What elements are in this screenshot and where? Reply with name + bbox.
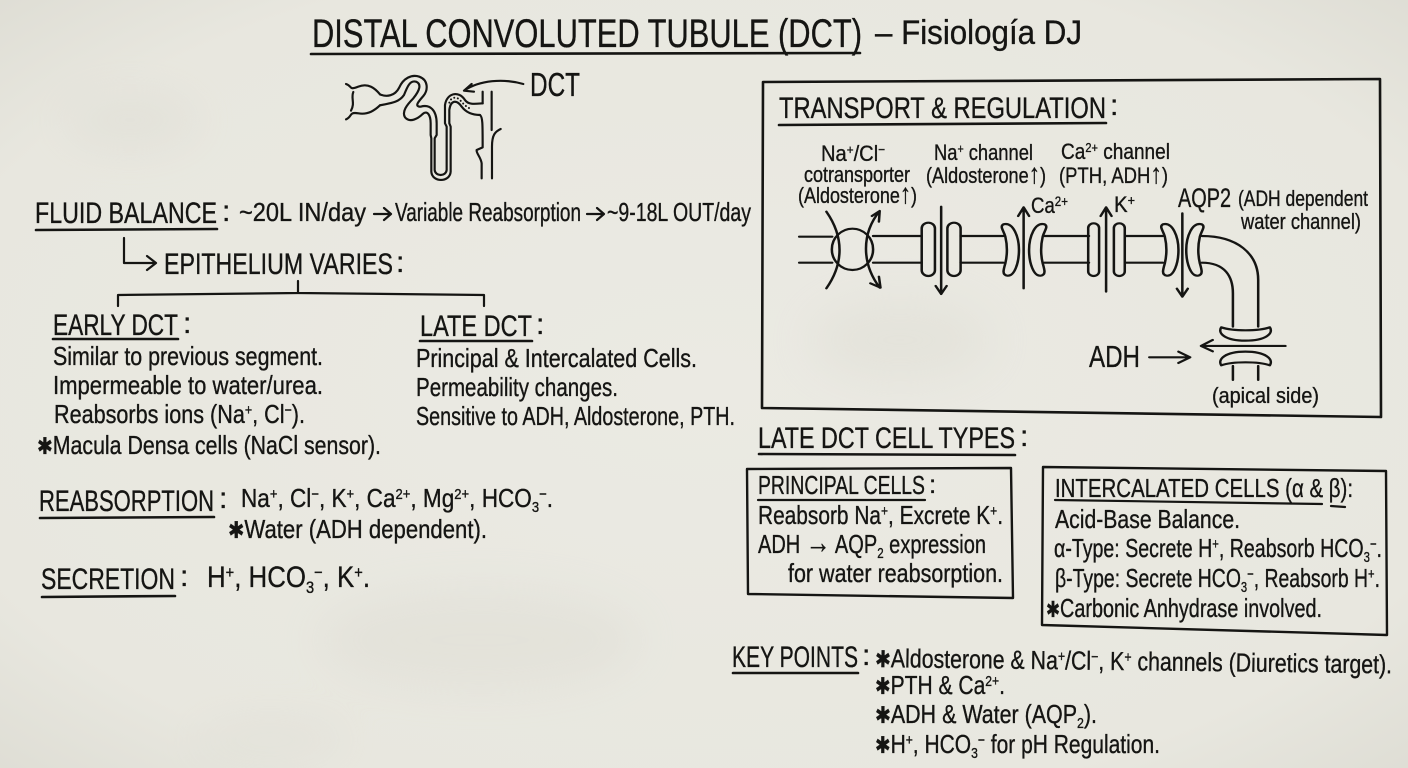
key points: ✱ADH & Water (AQP <box>875 699 1117 729</box>
reabsorption: − <box>311 486 319 503</box>
label: K ion: + <box>1128 192 1135 208</box>
key points: : <box>862 639 870 672</box>
reabsorption: : <box>219 482 227 515</box>
heading: late DCT cell types: LATE DCT CELL TYPES <box>758 422 1015 455</box>
label: Ca channel: (PTH, ADH↑) <box>1059 158 1168 189</box>
panel: early DCT: Similar to previous segment. <box>53 341 323 371</box>
reabsorption: , Mg <box>410 483 454 513</box>
panel: intercalated cells: + <box>1368 566 1375 583</box>
label: Na Cl cotransporter <box>798 141 917 209</box>
reabsorption: Na <box>241 483 274 513</box>
panel: transport and regulation <box>762 79 1381 417</box>
panel: intercalated cells: , Reabsorb H <box>1254 563 1368 593</box>
key points: + <box>1124 649 1132 666</box>
panel: early DCT: ✱Macula Densa cells (NaCl sensor). <box>37 430 381 460</box>
key points: 2 <box>1077 715 1084 732</box>
reabsorption: , Cl <box>277 483 311 513</box>
secretion: 3 <box>306 578 314 597</box>
label: Na channel <box>926 140 1046 189</box>
fluid balance line: ~20L IN/day <box>239 197 366 227</box>
panel: intercalated cells: − <box>1247 566 1254 583</box>
secretion: . <box>363 561 370 594</box>
label: Na Cl cotransporter: (Aldosterone↑) <box>798 178 917 209</box>
secretion: + <box>354 563 363 582</box>
fluid balance line: ~9-18L OUT/day <box>607 197 751 227</box>
panel: principal cells: Reabsorb Na <box>758 500 911 530</box>
label: AQP2: water channel) <box>1240 209 1361 234</box>
panel: principal cells: 2 <box>877 545 884 562</box>
nephron diagram with DCT label: DCT <box>530 66 580 103</box>
panel: principal cells: expression <box>884 529 986 559</box>
label: Na channel: channel <box>964 140 1033 165</box>
title: – Fisiología DJ <box>875 14 1082 52</box>
label: Ca channel: channel <box>1098 139 1170 164</box>
panel: early DCT: EARLY DCT <box>53 309 178 342</box>
fluid balance line: : <box>222 195 230 228</box>
panel: intercalated cells: + <box>1212 536 1219 553</box>
title: DISTAL CONVOLUTED TUBULE (DCT) <box>312 12 862 56</box>
secretion: : <box>180 560 188 593</box>
secretion: − <box>314 563 323 582</box>
label: Na Cl cotransporter: + <box>847 142 854 157</box>
nephron diagram with DCT label <box>346 66 580 180</box>
secretion: H <box>207 561 229 594</box>
panel: principal cells: , Excrete K <box>888 500 991 530</box>
label: apical side: (apical side) <box>1212 383 1319 408</box>
panel: early DCT: Impermeable to water/urea. <box>53 370 323 400</box>
panel: early DCT: + <box>245 402 252 419</box>
panel: principal cells: for water reabsorption. <box>788 558 1003 588</box>
reabsorption: , K <box>319 483 347 513</box>
transport heading: : <box>1110 89 1118 122</box>
epithelium varies branch: EPITHELIUM VARIES <box>164 248 393 281</box>
label: AQP2: AQP2 <box>1178 183 1231 213</box>
panel: intercalated cells <box>1042 467 1387 635</box>
reabsorption: , Ca <box>354 483 396 513</box>
label: K ion: K <box>1114 192 1129 217</box>
label: Ca channel: 2+ <box>1085 140 1098 155</box>
panel: principal cells <box>747 468 1013 598</box>
key points: − <box>978 732 985 749</box>
secretion <box>41 560 370 597</box>
label: Na Cl cotransporter: Na <box>821 141 850 166</box>
key points: 3 <box>971 745 978 762</box>
panel: late DCT: LATE DCT <box>420 310 532 343</box>
reabsorption: + <box>270 486 278 503</box>
key points: for pH Regulation. <box>985 729 1160 759</box>
key points: ✱PTH & Ca <box>875 670 1008 700</box>
reabsorption: 3 <box>532 499 539 516</box>
label: AQP2: (ADH dependent <box>1238 186 1369 211</box>
secretion: + <box>226 563 234 582</box>
label: AQP2 <box>1178 183 1369 234</box>
reabsorption <box>39 482 553 544</box>
epithelium varies branch: : <box>396 246 404 279</box>
panel: early DCT: , Cl <box>252 399 285 429</box>
panel: intercalated cells: β-Type: Secrete HCO <box>1055 563 1304 593</box>
transport heading: TRANSPORT & REGULATION <box>779 92 1106 125</box>
panel: principal cells: . <box>997 500 1003 530</box>
fluid balance line: Variable Reabsorption <box>395 197 581 227</box>
key points: ✱H <box>875 729 909 759</box>
panel: intercalated cells: α-Type: Secrete H <box>1054 533 1264 563</box>
key points: . <box>999 670 1005 700</box>
epithelium varies branch <box>118 238 484 306</box>
panel: intercalated cells: ✱Carbonic Anhydrase involved. <box>1046 593 1322 623</box>
panel: early DCT: Reabsorbs ions (Na <box>54 399 284 429</box>
panel: early DCT: ). <box>292 399 305 429</box>
panel: late DCT: : <box>536 308 544 341</box>
label: ADH: ADH <box>1089 339 1140 374</box>
label: Na Cl cotransporter: − <box>878 142 885 157</box>
secretion: , HCO <box>234 561 306 594</box>
panel: intercalated cells: − <box>1370 536 1377 553</box>
panel: intercalated cells: 3 <box>1241 579 1247 596</box>
label: Ca ion: 2+ <box>1055 193 1068 209</box>
panel: early DCT: : <box>183 307 191 340</box>
reabsorption: 2+ <box>454 486 469 503</box>
reabsorption: ✱Water (ADH dependent). <box>228 514 487 544</box>
key points: /Cl <box>1065 645 1091 676</box>
key points: ). <box>1084 699 1097 729</box>
panel: principal cells: + <box>990 503 997 520</box>
key points <box>732 639 1392 762</box>
label: Na channel: Na <box>934 140 963 165</box>
key points: 2+ <box>985 673 999 690</box>
panel: intercalated cells: . <box>1377 533 1382 563</box>
panel: early DCT: − <box>285 402 292 419</box>
label: Na Cl cotransporter: /Cl <box>854 141 878 166</box>
key points: , HCO <box>913 729 971 759</box>
panel: principal cells: + <box>881 503 888 520</box>
panel: principal cells: PRINCIPAL CELLS <box>758 470 925 500</box>
panel: intercalated cells: Acid-Base Balance. <box>1055 504 1240 534</box>
panel: intercalated cells: . <box>1375 563 1380 593</box>
reabsorption: REABSORPTION <box>39 485 214 518</box>
panel: late DCT: Permeability changes. <box>416 372 618 402</box>
reabsorption: + <box>347 486 354 503</box>
label: Ca channel: Ca <box>1061 139 1090 164</box>
panel: late DCT: Sensitive to ADH, Aldosterone, PTH. <box>416 401 735 431</box>
panel: intercalated cells: 3 <box>1364 549 1370 566</box>
label: Ca channel <box>1059 139 1170 189</box>
panel: late DCT: Principal & Intercalated Cells. <box>416 343 697 373</box>
key points: ✱Aldosterone & Na <box>875 643 1095 676</box>
reabsorption: − <box>539 486 547 503</box>
heading: late DCT cell types: : <box>1020 420 1028 453</box>
panel: early DCT <box>37 307 381 460</box>
key points: KEY POINTS <box>732 641 858 674</box>
label: Na channel: + <box>957 141 964 156</box>
reabsorption: , HCO <box>469 483 532 513</box>
panel: principal cells: : <box>929 469 936 499</box>
key points: + <box>906 732 913 749</box>
channel diagram <box>799 207 1285 380</box>
secretion: , K <box>323 561 354 594</box>
secretion: SECRETION <box>41 563 175 596</box>
label: Ca ion: Ca <box>1031 193 1060 218</box>
label: Na Cl cotransporter: cotransporter <box>804 162 910 187</box>
key points: − <box>1091 649 1099 666</box>
key points: + <box>1058 648 1065 665</box>
fluid balance line: FLUID BALANCE <box>35 197 217 230</box>
reabsorption: 2+ <box>396 486 411 503</box>
reabsorption: . <box>547 483 553 513</box>
panel: late DCT <box>416 308 735 431</box>
panel: principal cells: ADH → AQP <box>758 524 891 560</box>
panel: intercalated cells: , Reabsorb HCO <box>1219 533 1364 563</box>
key points: , K <box>1098 646 1125 676</box>
label: Na channel: (Aldosterone↑) <box>926 158 1046 189</box>
fluid balance line <box>35 195 751 230</box>
